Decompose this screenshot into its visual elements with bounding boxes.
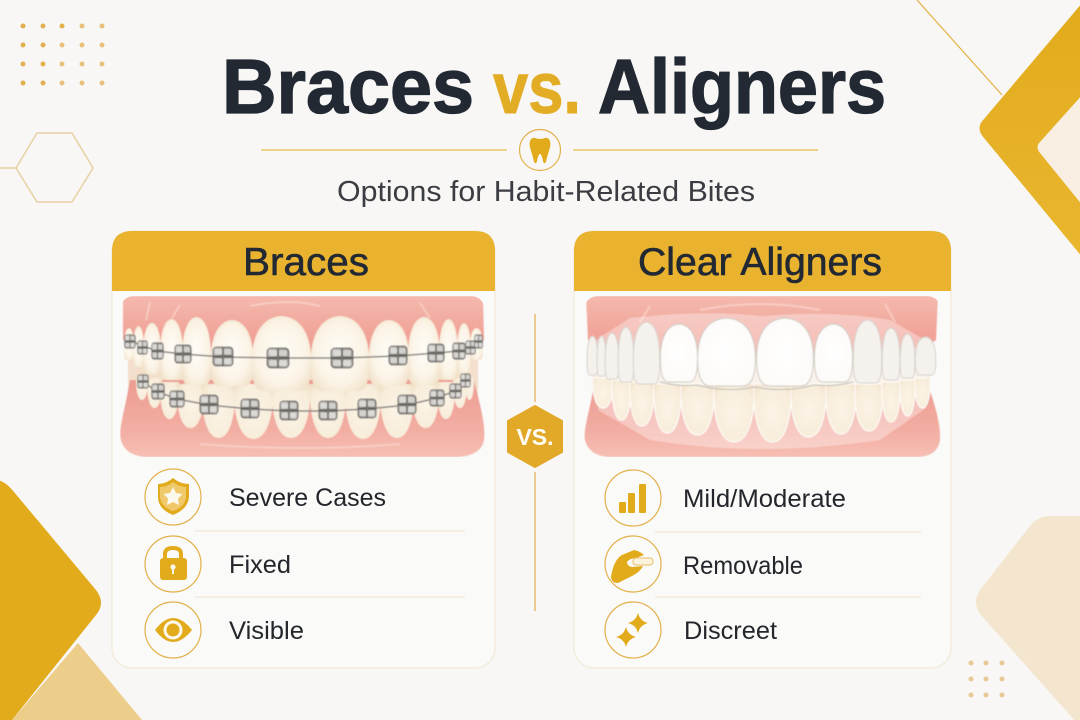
panel: clear aligners xyxy=(574,231,951,668)
decoration: top-right chevron xyxy=(917,0,1080,258)
decoration: bottom-left diamond xyxy=(0,480,142,720)
icon: bar chart xyxy=(605,470,661,526)
title: Aligners xyxy=(598,44,886,130)
decoration: hexagon outline xyxy=(0,133,93,202)
panel: braces xyxy=(112,231,495,668)
panel header: clear aligners xyxy=(574,231,951,291)
title: Braces xyxy=(222,44,474,130)
label: severe cases: Severe Cases xyxy=(229,484,386,512)
panel header: braces xyxy=(112,231,495,291)
panel header: clear aligners: Clear Aligners xyxy=(638,241,882,284)
label: mild/moderate: Mild/Moderate xyxy=(683,485,846,513)
title divider with tooth icon xyxy=(261,130,818,170)
title xyxy=(222,44,886,130)
icon: hand holding aligner xyxy=(605,536,661,592)
decoration: top-left dots xyxy=(20,24,104,86)
photo: teeth with metal braces xyxy=(120,296,484,457)
vs divider xyxy=(508,314,562,611)
label: discreet: Discreet xyxy=(684,617,777,645)
panel header: braces: Braces xyxy=(243,241,369,284)
label: fixed: Fixed xyxy=(229,551,291,579)
subtitle: Options for Habit-Related Bites xyxy=(337,176,755,208)
icon: eye xyxy=(145,602,201,658)
title: vs. xyxy=(493,49,581,129)
label: removable: Removable xyxy=(683,552,803,580)
photo: teeth with clear aligners xyxy=(585,296,940,457)
icon: shield with star xyxy=(145,469,201,525)
icon: padlock xyxy=(145,536,201,592)
label: visible: Visible xyxy=(229,617,304,645)
icon: sparkles xyxy=(605,602,661,658)
decoration: bottom-right shape xyxy=(968,516,1080,720)
vs divider: VS. xyxy=(516,424,554,450)
